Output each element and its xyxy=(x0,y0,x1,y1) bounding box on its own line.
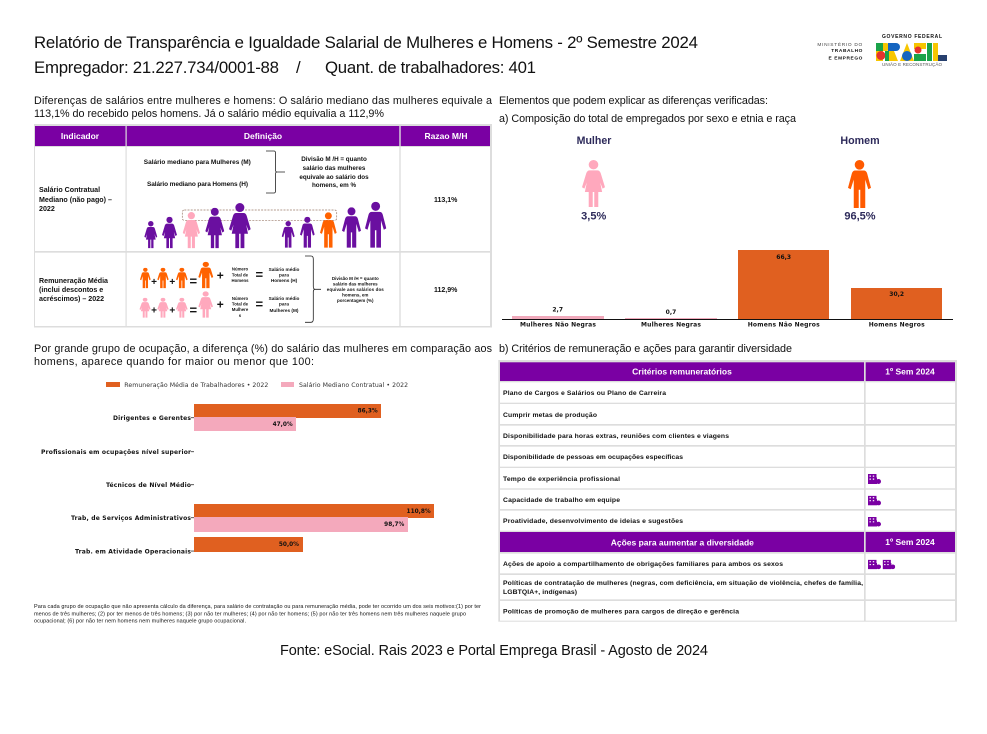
critérios list: Proatividade, desenvolvimento de ideias e sugestões xyxy=(503,518,683,525)
ações list: LGBTQIA+, indígenas) xyxy=(503,589,577,596)
logo: ministério e governo federal: E EMPREGO xyxy=(829,56,863,62)
formula: homens: Homens xyxy=(232,278,249,283)
formula: homens: Total de xyxy=(232,272,249,278)
intro text: diferenças de salários: 113,1% do recebido pelos homens. Já o salário médio equivalia a 112,9% xyxy=(34,108,384,120)
bar chart: composição por etnia e raça: Mulheres Não Negras xyxy=(520,321,596,328)
header: critérios remuneratórios: 1º Sem 2024 xyxy=(885,366,935,376)
intro text: grupo de ocupação: Por grande grupo de ocupação, a diferença (%) do salário das mulheres em comparação aos xyxy=(34,343,493,355)
formula: homens xyxy=(140,262,300,288)
logo: ministério e governo federal: TRABALHO xyxy=(831,48,863,54)
row label: salário contratual xyxy=(39,186,112,213)
label: mulher: Mulher xyxy=(577,135,611,147)
critérios list: Tempo de experiência profissional xyxy=(503,476,620,483)
label: homem xyxy=(840,135,880,223)
bar chart: composição por etnia e raça: 2,7 xyxy=(552,306,563,314)
formula: homens: + xyxy=(151,277,157,288)
formula: homens: = xyxy=(256,267,264,282)
bar chart: composição por etnia e raça: 0,7 xyxy=(666,309,676,316)
bar chart: diferença por grupo de ocupação: Trab. em Atividade Operacionais xyxy=(75,548,191,555)
bar chart: composição por etnia e raça: 30,2 xyxy=(889,291,904,298)
row label: salário contratual: Mediano (não pago) – xyxy=(39,196,112,204)
row label: salário contratual: Salário Contratual xyxy=(39,186,100,194)
footnote xyxy=(34,604,481,624)
title: Quant. de trabalhadores: 401 xyxy=(325,58,536,77)
formula: homens: Salário médio xyxy=(269,267,300,272)
row label: remuneração média: Remuneração Média xyxy=(39,277,108,285)
salário mediano labels xyxy=(144,159,251,188)
bar chart: composição por etnia e raça xyxy=(502,250,953,328)
title xyxy=(34,33,698,77)
table header: Razao M/H xyxy=(425,131,467,141)
header: ações para diversidade: Ações para aumentar a diversidade xyxy=(611,537,754,547)
heading: elementos explicativos: a) Composição do total de empregados por sexo e etnia e raça xyxy=(499,113,796,125)
label: mulher xyxy=(577,135,611,223)
footnote: ocupacional; (6) por não ter nem homens nem mulheres naquele grupo ocupacional. xyxy=(34,618,246,624)
value: 113,1%: 113,1% xyxy=(434,197,458,204)
ações list: Políticas de contratação de mulheres (negras, com deficiência, em situação de violência, chefes de família, xyxy=(503,580,863,587)
ações list xyxy=(503,561,863,615)
bar chart: diferença por grupo de ocupação: Técnicos de Nível Médio xyxy=(106,482,191,489)
row label: salário contratual: 2022 xyxy=(39,205,55,213)
bracket: mediana xyxy=(266,151,285,193)
formula: mulheres: + xyxy=(151,306,157,316)
formula: mulheres: = xyxy=(256,296,264,312)
bar chart: composição por etnia e raça: Homens Negros xyxy=(869,321,925,328)
formula: mulheres: = xyxy=(190,302,198,318)
critérios list: Disponibilidade de pessoas em ocupações específicas xyxy=(503,454,683,461)
icons: ações marcadas xyxy=(868,560,895,569)
title: / xyxy=(296,58,301,77)
definição divisão M/H: salário das mulheres xyxy=(303,165,366,172)
row label: remuneração média: acréscimos) – 2022 xyxy=(39,295,104,303)
formula: mulheres: Total de xyxy=(232,302,249,306)
formula: homens: + xyxy=(169,277,175,288)
salário mediano labels: Salário mediano para Mulheres (M) xyxy=(144,159,251,166)
label: mulher: 3,5% xyxy=(581,211,606,223)
intro text: diferenças de salários xyxy=(34,95,492,120)
bar chart: composição por etnia e raça: Mulheres Negras xyxy=(641,321,701,328)
intro text: grupo de ocupação xyxy=(34,343,493,368)
critérios list: Disponibilidade para horas extras, reuniões com clientes e viagens xyxy=(503,433,729,440)
panel: composição por sexo xyxy=(577,135,880,223)
definição divisão M/H xyxy=(299,156,369,189)
logo: ministério e governo federal xyxy=(817,34,947,67)
formula: mulheres xyxy=(140,291,300,318)
definição divisão M/H: equivale ao salário dos xyxy=(299,174,369,181)
definição divisão M/H média: homens, em xyxy=(342,292,368,297)
source: Fonte: eSocial. Rais 2023 e Portal Emprega Brasil - Agosto de 2024 xyxy=(280,643,708,659)
critérios list: Plano de Cargos e Salários ou Plano de Carreira xyxy=(503,390,666,397)
legend xyxy=(106,381,408,389)
bar chart: composição por etnia e raça: Homens Não Negros xyxy=(748,321,820,328)
table header: Indicador xyxy=(61,131,100,141)
bar chart: diferença por grupo de ocupação: 86,3% xyxy=(358,408,378,414)
definição divisão M/H média: Divisão M /H = quanto xyxy=(332,276,379,281)
definição divisão M/H média xyxy=(327,276,384,303)
bar chart: composição por etnia e raça: 66,3 xyxy=(776,254,791,261)
formula: mulheres: Número xyxy=(232,296,248,301)
dashed highlight: mediana xyxy=(182,210,337,220)
bar chart: diferença por grupo de ocupação xyxy=(41,404,434,555)
bracket: média xyxy=(305,256,321,322)
ações list: Ações de apoio a compartilhamento de obrigações familiares para ambos os sexos xyxy=(503,561,783,568)
title: Relatório de Transparência e Igualdade Salarial de Mulheres e Homens - 2º Semestre 2024 xyxy=(34,33,698,52)
critérios list xyxy=(503,390,729,525)
panel: critérios e ações xyxy=(498,360,957,622)
legend: Remuneração Média de Trabalhadores • 2022 xyxy=(124,381,268,389)
bar chart: diferença por grupo de ocupação: Profissionais em ocupações nível superior xyxy=(41,449,191,456)
bar chart: diferença por grupo de ocupação: 50,0% xyxy=(279,542,299,548)
intro text: diferenças de salários: Diferenças de salários entre mulheres e homens: O salário mediano das mulheres equivale a xyxy=(34,95,492,107)
bar chart: diferença por grupo de ocupação: Trab, de Serviços Administrativos xyxy=(71,515,191,522)
formula: mulheres: Mulhere xyxy=(232,307,249,312)
footnote: menos de três mulheres; (2) por ter menos de três homens; (3) por não ter mulheres; (4) por não ter homens; (5) por não ter três homens nem três mulheres naquele grupo xyxy=(34,611,466,617)
label: homem: 96,5% xyxy=(844,211,876,223)
icons: critérios marcados xyxy=(868,474,881,526)
panel: tabela de indicadores xyxy=(34,124,492,328)
definição divisão M/H: homens, em % xyxy=(312,182,356,189)
icons: homens em ordem salarial xyxy=(282,202,386,248)
formula: homens: para xyxy=(279,272,289,278)
label: homem: Homem xyxy=(840,135,880,147)
table header xyxy=(35,126,490,146)
salário mediano labels: Salário mediano para Homens (H) xyxy=(147,181,248,188)
header: critérios remuneratórios: Critérios remuneratórios xyxy=(632,366,732,376)
formula: mulheres: Salário médio xyxy=(269,296,300,301)
formula: homens: + xyxy=(217,268,224,282)
definição divisão M/H média: equivale aos salários dos xyxy=(327,287,384,292)
heading: elementos explicativos: Elementos que podem explicar as diferenças verificadas: xyxy=(499,95,768,107)
formula: mulheres: + xyxy=(169,306,175,316)
logo: ministério e governo federal: GOVERNO FEDERAL xyxy=(882,34,942,40)
formula: mulheres: + xyxy=(217,298,224,312)
heading: elementos explicativos xyxy=(499,95,796,125)
title: Empregador: 21.227.734/0001-88 xyxy=(34,58,279,77)
row label: remuneração média: (inclui descontos e xyxy=(39,286,103,294)
definição divisão M/H: Divisão M /H = quanto xyxy=(301,156,367,163)
ações list: Políticas de promoção de mulheres para cargos de direção e gerência xyxy=(503,608,739,615)
bar chart: diferença por grupo de ocupação: 47,0% xyxy=(273,422,293,428)
logo: ministério e governo federal: UNIÃO E RECONSTRUÇÃO xyxy=(882,61,942,67)
formula: homens: = xyxy=(190,274,198,288)
bar chart: diferença por grupo de ocupação: Dirigentes e Gerentes xyxy=(113,415,191,422)
formula: mulheres: Mulheres (M) xyxy=(270,308,299,313)
bar chart: diferença por grupo de ocupação: 110,8% xyxy=(407,509,431,515)
header: critérios remuneratórios xyxy=(500,362,955,381)
formula: homens: Número xyxy=(232,266,248,272)
heading: critérios: b) Critérios de remuneração e ações para garantir diversidade xyxy=(499,343,792,355)
logo: ministério e governo federal: MINISTÉRIO DO xyxy=(817,41,863,48)
value: 112,9%: 112,9% xyxy=(434,287,458,294)
critérios list: Cumprir metas de produção xyxy=(503,412,597,419)
formula: homens: Homens (H) xyxy=(271,278,298,283)
row label: remuneração média xyxy=(39,277,108,303)
table header: Definição xyxy=(244,131,282,141)
formula: mulheres: para xyxy=(279,302,289,306)
definição divisão M/H média: salário das mulheres xyxy=(333,282,378,287)
intro text: grupo de ocupação: homens, aparece quando for maior ou menor que 100: xyxy=(34,356,314,368)
bar chart: diferença por grupo de ocupação: 98,7% xyxy=(384,522,404,528)
formula: mulheres: s xyxy=(239,313,242,318)
icons: mulheres em ordem salarial xyxy=(144,203,251,248)
footnote: Para cada grupo de ocupação que não apresenta cálculo da diferença, para salário de contratação ou para remuneração média, pode ter ocorrido um dos seis motivos:(1) por ter xyxy=(34,604,481,610)
legend: Salário Mediano Contratual • 2022 xyxy=(299,381,408,389)
header: ações para diversidade xyxy=(500,532,955,552)
header: ações para diversidade: 1º Sem 2024 xyxy=(885,537,935,547)
definição divisão M/H média: porcentagem (%) xyxy=(337,298,374,303)
critérios list: Capacidade de trabalho em equipe xyxy=(503,497,620,504)
